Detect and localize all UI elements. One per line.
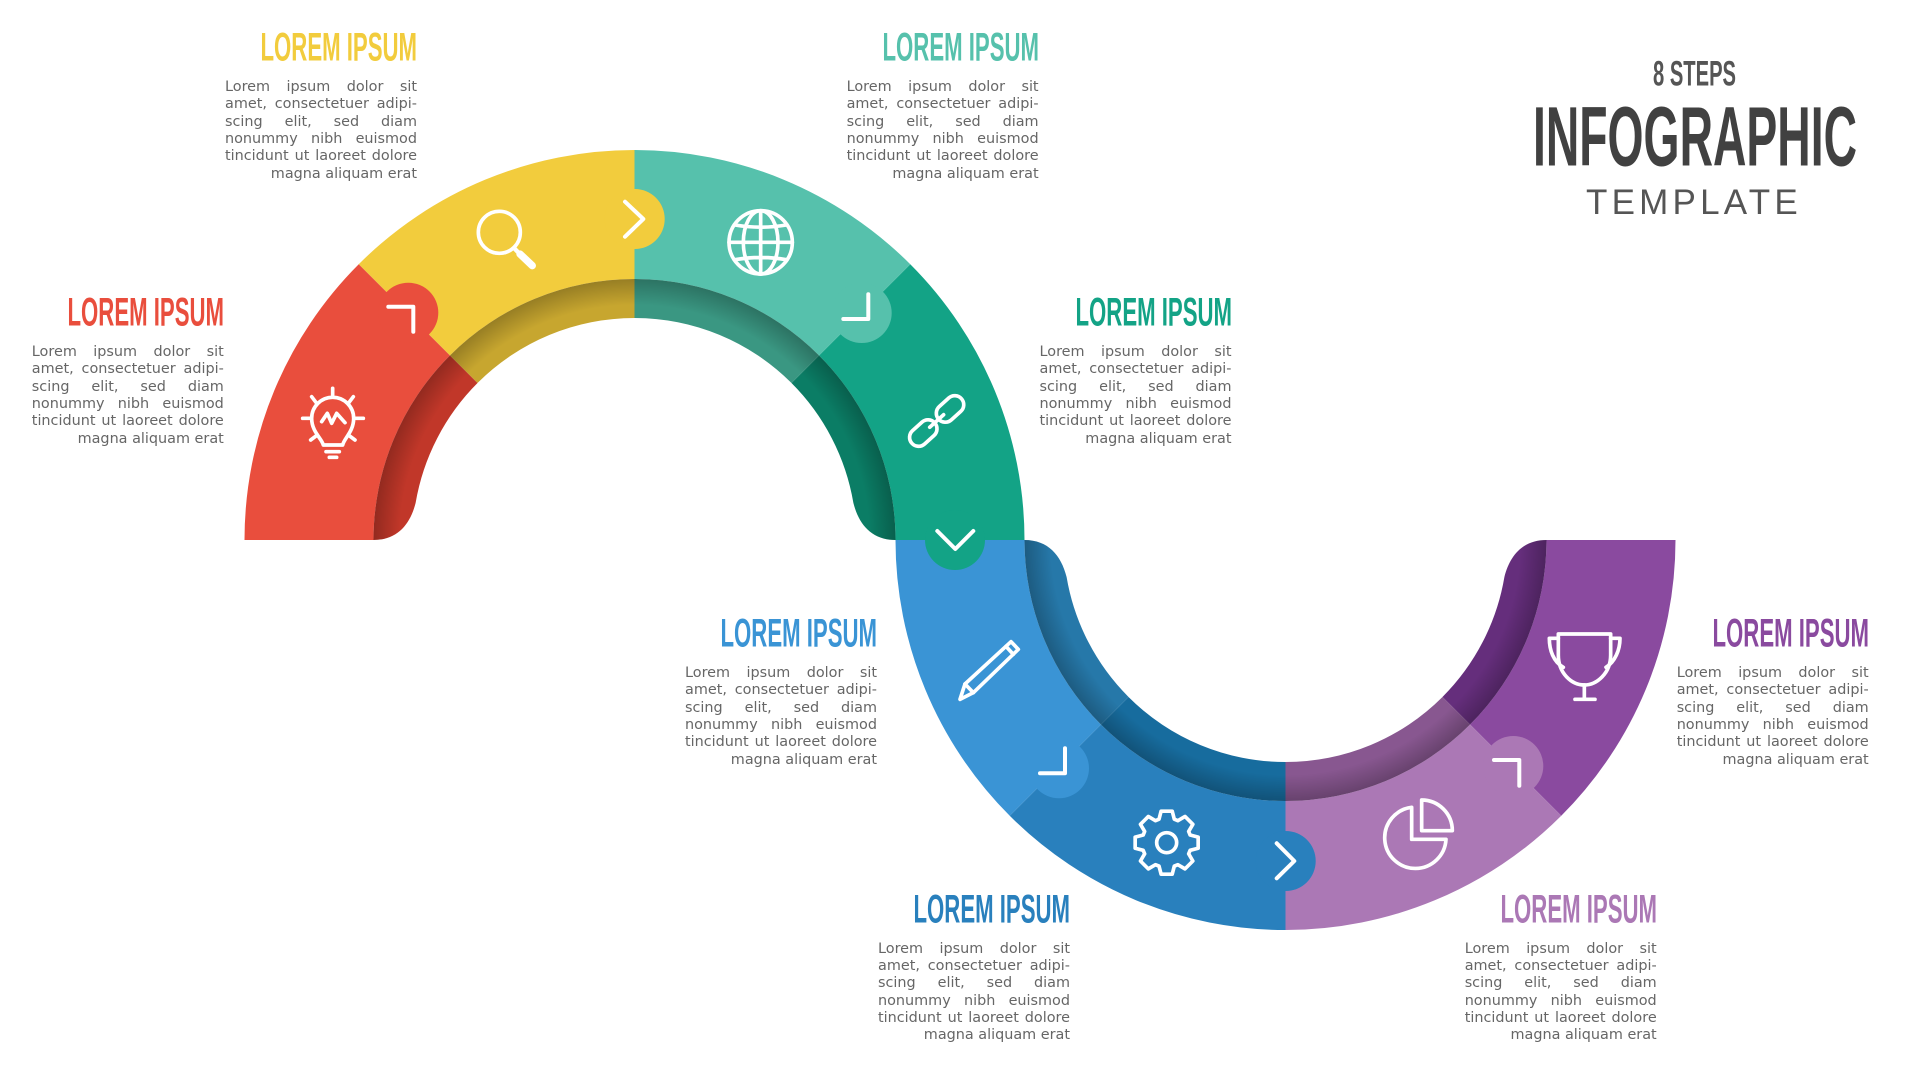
text block: step 4: tincidunt ut laoreet dolore bbox=[1040, 413, 1232, 429]
puzzle tab and arrow bbox=[832, 283, 892, 343]
step 3: teal segment bbox=[634, 150, 910, 383]
text block: step 4: LOREM IPSUM bbox=[1075, 291, 1232, 335]
text block: step 7: scing elit, sed diam bbox=[1465, 975, 1657, 991]
text block: step 7: tincidunt ut laoreet dolore bbox=[1465, 1010, 1657, 1026]
text block: step 8: magna aliquam erat bbox=[1722, 752, 1869, 768]
text block: step 1: magna aliquam erat bbox=[78, 431, 224, 447]
text block: step 4: nonummy nibh euismod bbox=[1040, 396, 1232, 412]
text block: step 7: LOREM IPSUM bbox=[1500, 887, 1657, 931]
text block: step 2: LOREM IPSUM bbox=[260, 26, 417, 70]
text block: step 8 bbox=[1677, 612, 1869, 768]
text block: step 3 bbox=[847, 26, 1039, 182]
puzzle tab and arrow bbox=[1256, 831, 1316, 891]
text block: step 2 bbox=[225, 26, 417, 182]
text block: step 1: nonummy nibh euismod bbox=[32, 396, 224, 412]
text block: step 3: magna aliquam erat bbox=[892, 166, 1039, 182]
text block: step 6: nonummy nibh euismod bbox=[878, 993, 1070, 1009]
text block: step 5 bbox=[685, 612, 877, 768]
text block: step 4 bbox=[1040, 291, 1232, 447]
text block: step 8: tincidunt ut laoreet dolore bbox=[1677, 734, 1869, 750]
text block: step 5: nonummy nibh euismod bbox=[685, 717, 877, 733]
puzzle tab and arrow bbox=[605, 189, 665, 249]
step 1: red segment bbox=[244, 264, 478, 540]
text block: step 6: LOREM IPSUM bbox=[914, 887, 1070, 931]
title: 8 STEPS bbox=[1653, 55, 1736, 94]
title: TEMPLATE bbox=[1586, 183, 1798, 222]
text block: step 2: nonummy nibh euismod bbox=[225, 131, 417, 147]
text block: step 5: LOREM IPSUM bbox=[720, 612, 877, 656]
icon: pencil bbox=[960, 642, 1018, 699]
text block: step 2: amet, consectetuer adipi- bbox=[225, 96, 417, 112]
text block: step 3: LOREM IPSUM bbox=[882, 26, 1039, 70]
text block: step 3: nonummy nibh euismod bbox=[847, 131, 1039, 147]
text block: step 5: scing elit, sed diam bbox=[685, 700, 877, 716]
step 7: light purple segment bbox=[1286, 697, 1561, 930]
text block: step 6: amet, consectetuer adipi- bbox=[878, 958, 1070, 974]
text block: step 6: scing elit, sed diam bbox=[878, 975, 1070, 991]
text block: step 8: nonummy nibh euismod bbox=[1677, 717, 1869, 733]
puzzle tab and arrow bbox=[1029, 738, 1089, 798]
text block: step 8: Lorem ipsum dolor sit bbox=[1677, 665, 1869, 681]
step 4: green segment bbox=[791, 264, 1024, 570]
icon: pie chart bbox=[1385, 800, 1452, 868]
text block: step 1: Lorem ipsum dolor sit bbox=[32, 344, 224, 360]
title bbox=[1533, 55, 1857, 222]
text block: step 2: scing elit, sed diam bbox=[225, 114, 417, 130]
text block: step 3: scing elit, sed diam bbox=[847, 114, 1039, 130]
text block: step 7: amet, consectetuer adipi- bbox=[1465, 958, 1657, 974]
text block: step 5: magna aliquam erat bbox=[731, 752, 877, 768]
puzzle tab and arrow bbox=[1483, 736, 1543, 796]
text block: step 7 bbox=[1465, 887, 1657, 1043]
text block: step 4: magna aliquam erat bbox=[1085, 431, 1232, 447]
text block: step 4: scing elit, sed diam bbox=[1040, 379, 1232, 395]
text block: step 6: magna aliquam erat bbox=[924, 1027, 1070, 1043]
text block: step 7: Lorem ipsum dolor sit bbox=[1465, 941, 1657, 957]
text block: step 1: amet, consectetuer adipi- bbox=[32, 361, 224, 377]
text block: step 4: Lorem ipsum dolor sit bbox=[1040, 344, 1232, 360]
puzzle tab and arrow bbox=[925, 510, 985, 570]
icon: trophy bbox=[1549, 634, 1620, 699]
icon: globe bbox=[729, 211, 792, 274]
text block: step 8: amet, consectetuer adipi- bbox=[1677, 682, 1869, 698]
text block: step 3: tincidunt ut laoreet dolore bbox=[847, 148, 1039, 164]
icon: magnifier bbox=[478, 211, 532, 266]
text block: step 2: tincidunt ut laoreet dolore bbox=[225, 148, 417, 164]
step 6: dark blue segment bbox=[1010, 697, 1316, 930]
step 5: blue segment bbox=[896, 540, 1129, 816]
text block: step 6: Lorem ipsum dolor sit bbox=[878, 941, 1070, 957]
icon: gear bbox=[1135, 811, 1198, 874]
text block: step 6 bbox=[878, 887, 1070, 1043]
icon: light bulb bbox=[303, 388, 363, 457]
text block: step 7: nonummy nibh euismod bbox=[1465, 993, 1657, 1009]
text block: step 1: tincidunt ut laoreet dolore bbox=[32, 413, 224, 429]
text block: step 5: amet, consectetuer adipi- bbox=[685, 682, 877, 698]
text block: step 2: magna aliquam erat bbox=[271, 166, 417, 182]
text block: step 1 bbox=[32, 291, 224, 447]
text block: step 5: tincidunt ut laoreet dolore bbox=[685, 734, 877, 750]
text block: step 2: Lorem ipsum dolor sit bbox=[225, 79, 417, 95]
text block: step 3: amet, consectetuer adipi- bbox=[847, 96, 1039, 112]
text block: step 6: tincidunt ut laoreet dolore bbox=[878, 1010, 1070, 1026]
text block: step 1: LOREM IPSUM bbox=[67, 291, 224, 335]
step 8: purple segment bbox=[1442, 540, 1676, 816]
text block: step 7: magna aliquam erat bbox=[1510, 1027, 1657, 1043]
icon: chain link bbox=[906, 392, 967, 450]
text block: step 4: amet, consectetuer adipi- bbox=[1040, 361, 1232, 377]
step 2: yellow segment bbox=[359, 150, 665, 383]
text block: step 1: scing elit, sed diam bbox=[32, 379, 224, 395]
puzzle tab and arrow bbox=[378, 283, 438, 343]
text block: step 5: Lorem ipsum dolor sit bbox=[685, 665, 877, 681]
text block: step 3: Lorem ipsum dolor sit bbox=[847, 79, 1039, 95]
text block: step 8: scing elit, sed diam bbox=[1677, 700, 1869, 716]
